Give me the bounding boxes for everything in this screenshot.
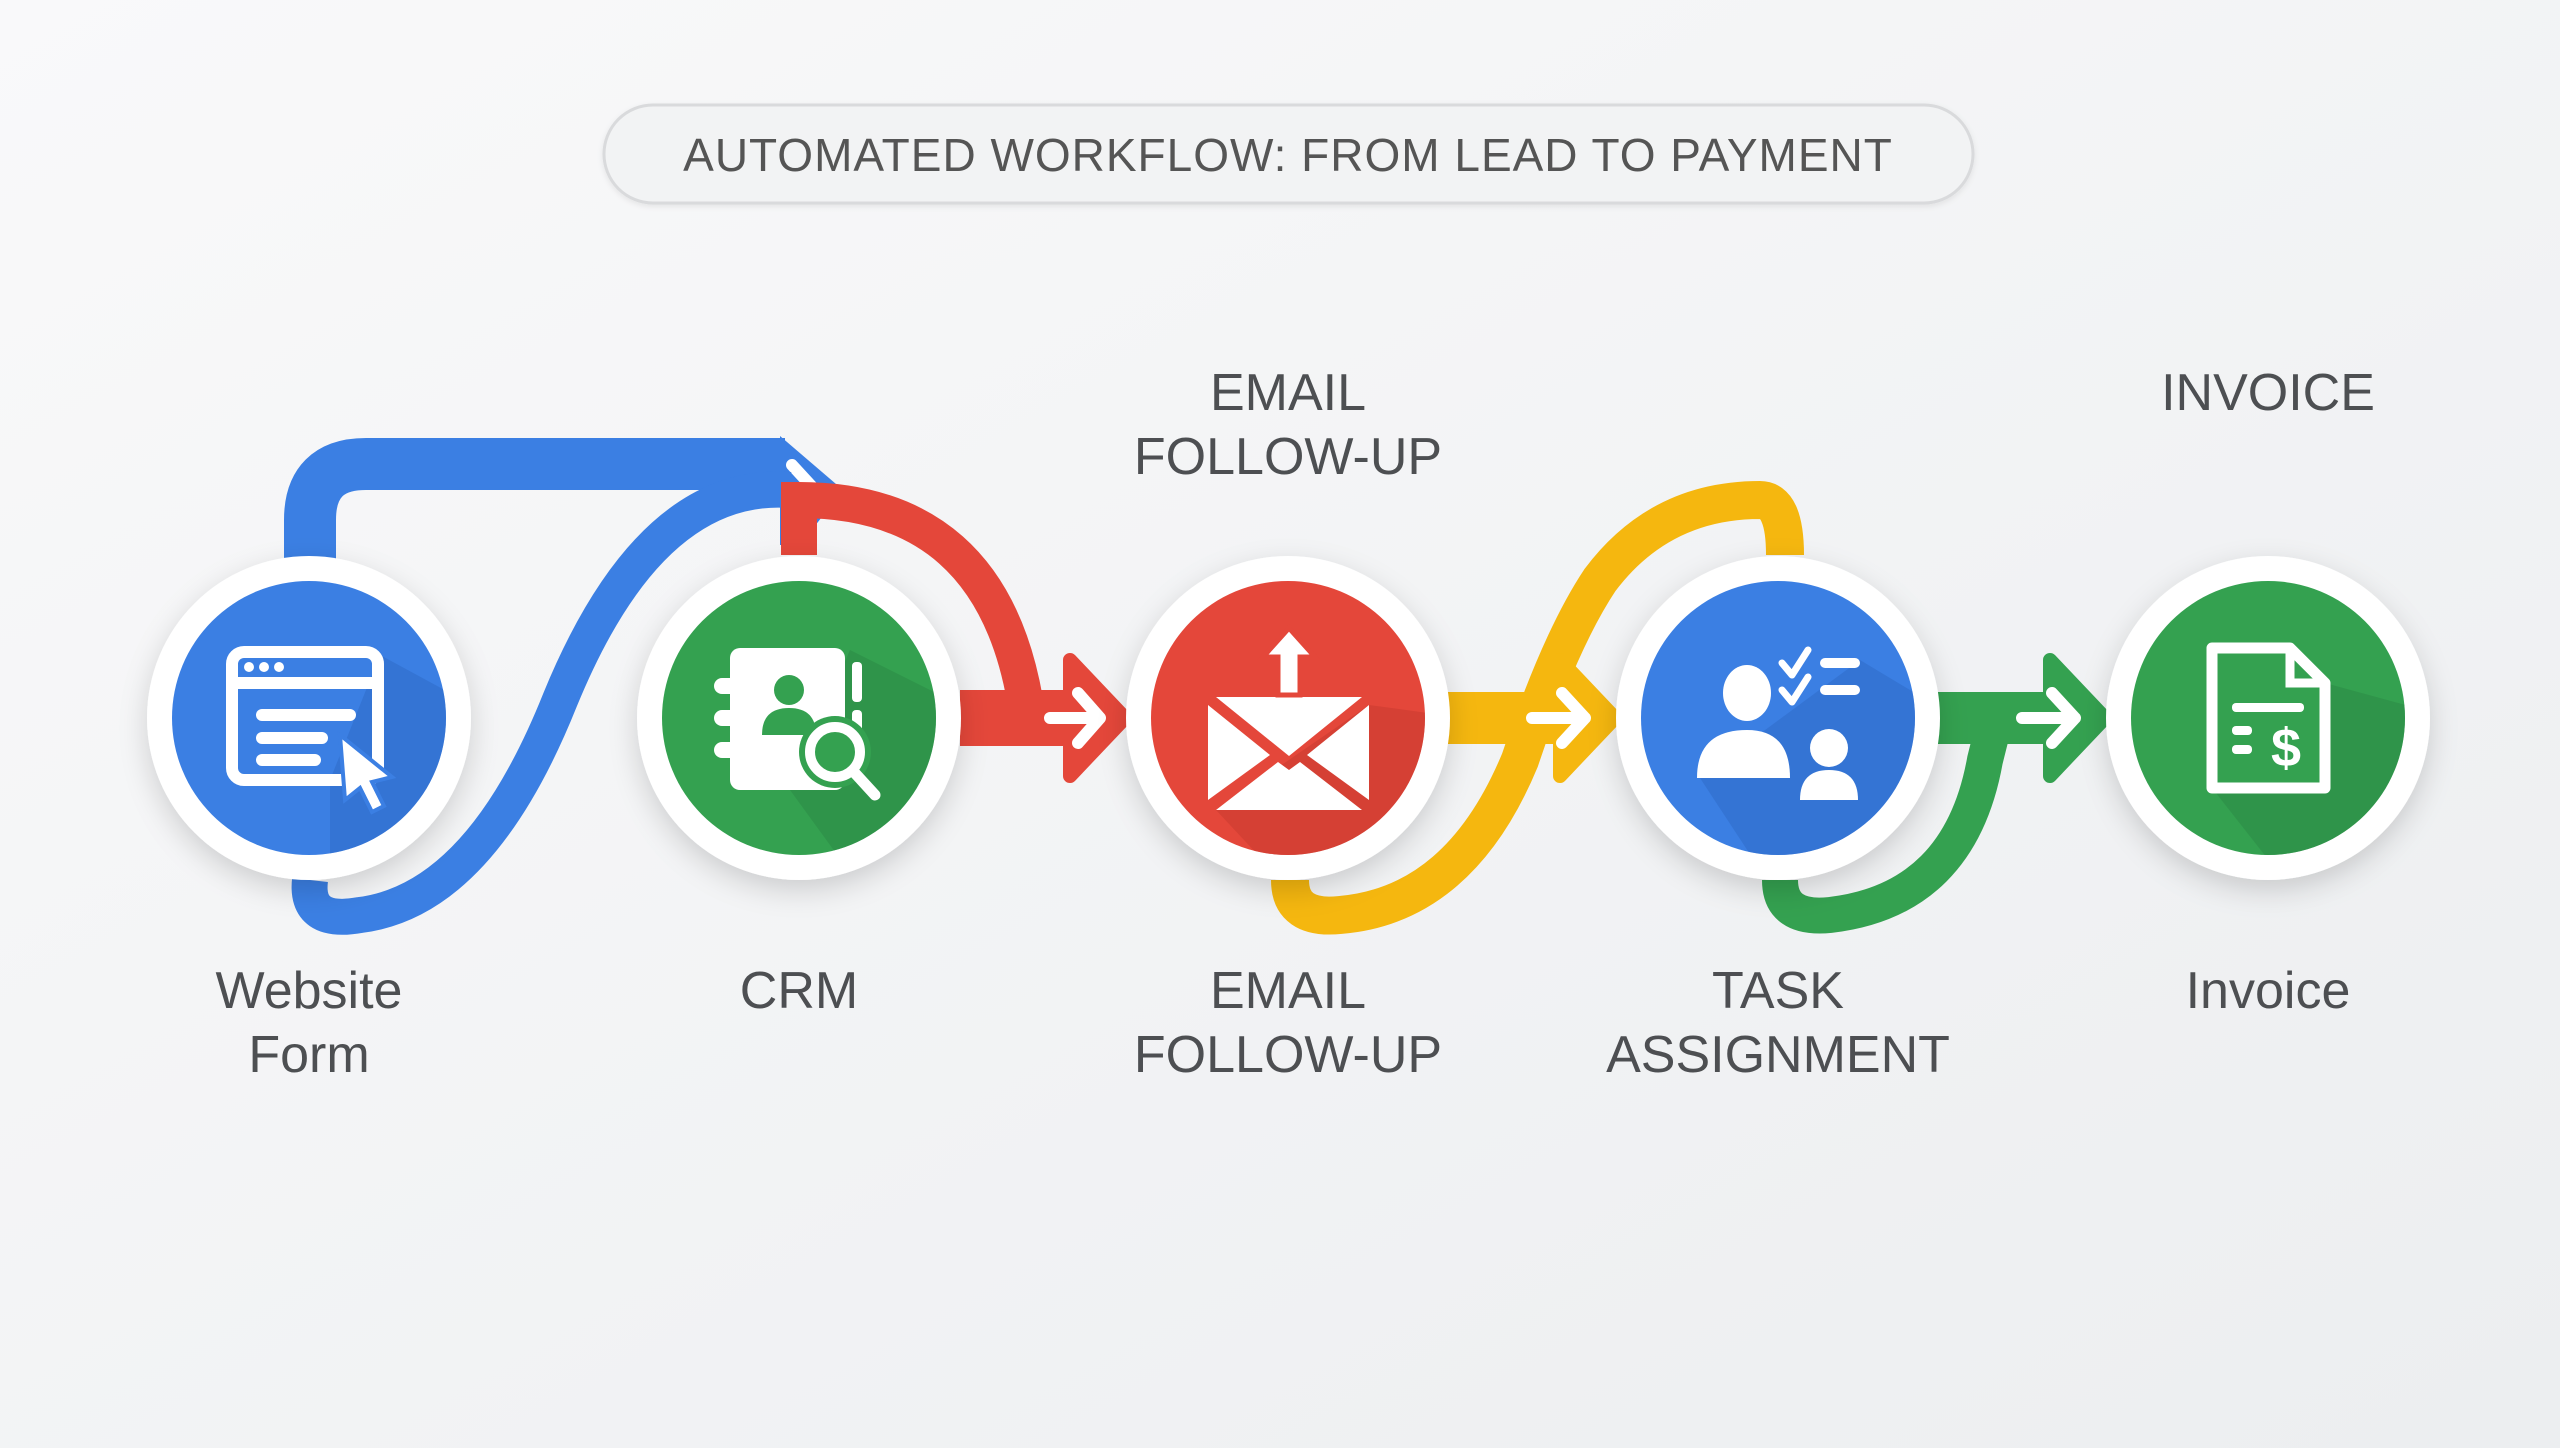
arrow: blue S-curve: [310, 490, 790, 917]
label: Website Form: Website: [216, 962, 402, 1020]
label: Email Follow-up (bottom): FOLLOW-UP: [1134, 1026, 1442, 1084]
icon: contact book with magnifier: [714, 648, 862, 790]
arrow: red from CRM to Email: [799, 500, 1125, 776]
label: Email Follow-up (top): FOLLOW-UP: [1134, 428, 1442, 486]
node: Website Form: [147, 556, 500, 900]
label: Task Assignment: TASK: [1712, 962, 1844, 1020]
node: Invoice: $: [2271, 718, 2301, 778]
icon: web form: [232, 652, 378, 780]
label: Invoice (bottom): Invoice: [2186, 962, 2350, 1020]
arrow: green from Task to Invoice: [1780, 660, 2105, 916]
node: CRM: [637, 556, 990, 900]
arrow: yellow from Email to Task: [1290, 500, 1785, 916]
label: Website Form: Form: [248, 1026, 370, 1084]
icon: people with checklist: [1697, 658, 1860, 800]
label: Task Assignment: ASSIGNMENT: [1606, 1026, 1950, 1084]
label: Invoice (top): INVOICE: [2161, 364, 2375, 422]
label: Email Follow-up (top): EMAIL: [1210, 364, 1366, 422]
title: [604, 105, 1973, 203]
node: Task Assignment: [1616, 556, 1960, 900]
title: AUTOMATED WORKFLOW: FROM LEAD TO PAYMENT: [683, 129, 1893, 181]
node: Invoice: [2106, 556, 2460, 900]
icon: invoice document: [2212, 648, 2325, 788]
label: CRM: CRM: [740, 962, 858, 1020]
icon: envelope with up arrow: [1208, 628, 1369, 810]
node: Email Follow-up: [1126, 556, 1480, 900]
arrow: blue top route from Website Form to CRM: [310, 436, 843, 560]
label: Email Follow-up (bottom): EMAIL: [1210, 962, 1366, 1020]
